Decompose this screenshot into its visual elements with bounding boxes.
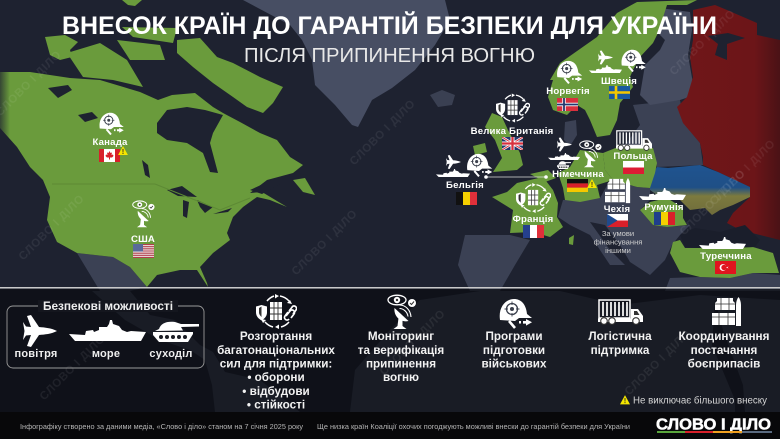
label: air: повітря <box>15 348 57 360</box>
land: Africa and South America under panel <box>350 291 780 412</box>
marker: Czechia: Чехія <box>604 204 630 215</box>
capability: monitoring: та верифікація <box>358 344 444 357</box>
title: ВНЕСОК КРАЇН ДО ГАРАНТІЙ БЕЗПЕКИ ДЛЯ УКРАЇНИ <box>62 10 717 40</box>
marker: Germany <box>548 137 604 192</box>
capability: multinational forces: Розгортання <box>240 330 312 343</box>
capability: logistics: підтримка <box>591 344 650 357</box>
marker: Turkey: Туреччина <box>700 251 752 262</box>
watermarks: СЛОВО І ДІЛО <box>623 328 693 398</box>
marker: Romania <box>639 188 686 225</box>
land: Finland <box>640 8 695 105</box>
land: Middle East <box>665 273 780 291</box>
marker: Poland <box>613 131 653 174</box>
marker: Czechia <box>594 178 642 255</box>
marker: Czechia: фінансування <box>594 238 642 246</box>
land: Greenland <box>243 0 450 127</box>
marker: Norway <box>546 61 590 111</box>
capability: training programmes: підготовки <box>483 344 545 357</box>
marker: USA: США <box>131 234 155 245</box>
capability: ammunition <box>679 297 769 370</box>
Corsica <box>569 235 574 245</box>
capability: logistics: Логістична <box>588 330 652 343</box>
land: central Europe and Balkans <box>558 180 690 275</box>
icon: land <box>153 322 199 342</box>
divider line <box>0 287 780 288</box>
icon: sea <box>69 320 146 341</box>
marker: Romania: Румунія <box>644 202 684 213</box>
marker: Czechia: За умови <box>602 229 634 238</box>
US-Canada border <box>52 184 250 210</box>
capability: training programmes: Програми <box>485 330 543 343</box>
capability: multinational forces: • відбудови <box>242 385 310 398</box>
bottom panel <box>0 289 780 412</box>
label: land: суходіл <box>149 348 193 360</box>
marker: Germany: Німеччина <box>552 169 604 180</box>
Norway and Sweden <box>548 0 697 137</box>
marker: USA <box>131 201 155 258</box>
land: Baltics and Belarus <box>625 100 703 167</box>
France <box>492 177 563 237</box>
footer text: note: Ще низка країн Коаліції охочих погоджують можливі внески до гарантій безпеки для України <box>317 422 630 431</box>
land: Mexico <box>77 253 147 291</box>
logo: СЛОВО І ДІЛО <box>656 416 771 434</box>
Romania <box>640 198 687 227</box>
Ireland <box>473 143 487 155</box>
marker: Czechia: іншими <box>605 246 631 255</box>
watermarks: СЛОВО І ДІЛО <box>348 98 418 168</box>
capability: training programmes <box>481 299 547 370</box>
marker: Turkey <box>699 237 752 274</box>
capability: multinational forces: • стійкості <box>247 398 305 412</box>
United Kingdom <box>485 113 523 172</box>
marker: Belgium: Бельгія <box>446 180 484 191</box>
coalition countries: Europe <box>473 0 779 278</box>
capability: multinational forces <box>217 294 335 412</box>
footer text: source: Інфографіку створено за даними медіа, «Слово і діло» станом на 7 січня 2025 року <box>20 422 303 431</box>
footer band <box>0 412 780 439</box>
capability: multinational forces: • оборони <box>247 371 305 384</box>
capability: logistics <box>588 300 652 357</box>
legend: security capabilities <box>7 300 204 368</box>
watermarks: СЛОВО І ДІЛО <box>378 308 448 378</box>
marker: United Kingdom: Велика Британія <box>471 126 553 137</box>
capability: multinational forces: багатонаціональних <box>217 344 335 357</box>
land: Iceland <box>430 90 455 107</box>
marker: Canada: Канада <box>92 137 128 148</box>
Belgium <box>530 170 556 182</box>
subtitle: ПІСЛЯ ПРИПИНЕННЯ ВОГНЮ <box>244 44 535 67</box>
marker: Sweden <box>589 50 646 99</box>
left edge shading <box>0 0 10 291</box>
capability: monitoring: припинення <box>366 358 436 370</box>
water: Hudson Bay and lakes <box>48 85 280 218</box>
capability: multinational forces: сил для підтримки: <box>220 358 332 370</box>
land: Denmark <box>564 120 577 146</box>
icon: air <box>23 315 57 347</box>
marker: Norway: Норвегія <box>546 86 590 97</box>
marker: Poland: Польща <box>613 151 653 162</box>
Poland <box>603 147 657 188</box>
land: Russia <box>677 5 780 240</box>
watermarks: СЛОВО І ДІЛО <box>678 168 748 238</box>
capability: ammunition: Координування <box>679 330 769 343</box>
watermarks: СЛОВО І ДІЛО <box>17 193 87 263</box>
capability: ammunition: боєприпасів <box>688 358 760 370</box>
marker: France: Франція <box>513 214 553 225</box>
marker: Sweden: Швеція <box>601 76 637 87</box>
Black Sea <box>680 225 760 248</box>
marker: France <box>513 183 553 238</box>
watermarks: СЛОВО І ДІЛО <box>668 8 738 78</box>
legend heading: Безпекові можливості <box>43 301 173 313</box>
capability: monitoring: вогню <box>383 371 419 384</box>
capability: ammunition: постачання <box>691 344 757 357</box>
watermarks: СЛОВО І ДІЛО <box>708 138 778 208</box>
Turkey <box>670 240 779 278</box>
warning note: Не виключає більшого внеску <box>633 396 767 406</box>
watermarks: СЛОВО І ДІЛО <box>290 208 360 278</box>
capability: monitoring <box>358 295 444 384</box>
marker: Canada <box>92 113 128 162</box>
marker: United Kingdom <box>471 93 553 150</box>
capability: training programmes: військових <box>481 358 547 370</box>
Germany <box>558 150 613 202</box>
watermarks: СЛОВО І ДІЛО <box>38 333 108 403</box>
land: Ukraine <box>650 165 750 215</box>
marker: Belgium <box>436 154 548 205</box>
label: sea: море <box>92 348 120 360</box>
White Sea <box>708 33 745 60</box>
coalition countries: North America <box>0 0 315 287</box>
land: Spain <box>458 235 530 291</box>
capability: monitoring: Моніторинг <box>368 330 434 343</box>
